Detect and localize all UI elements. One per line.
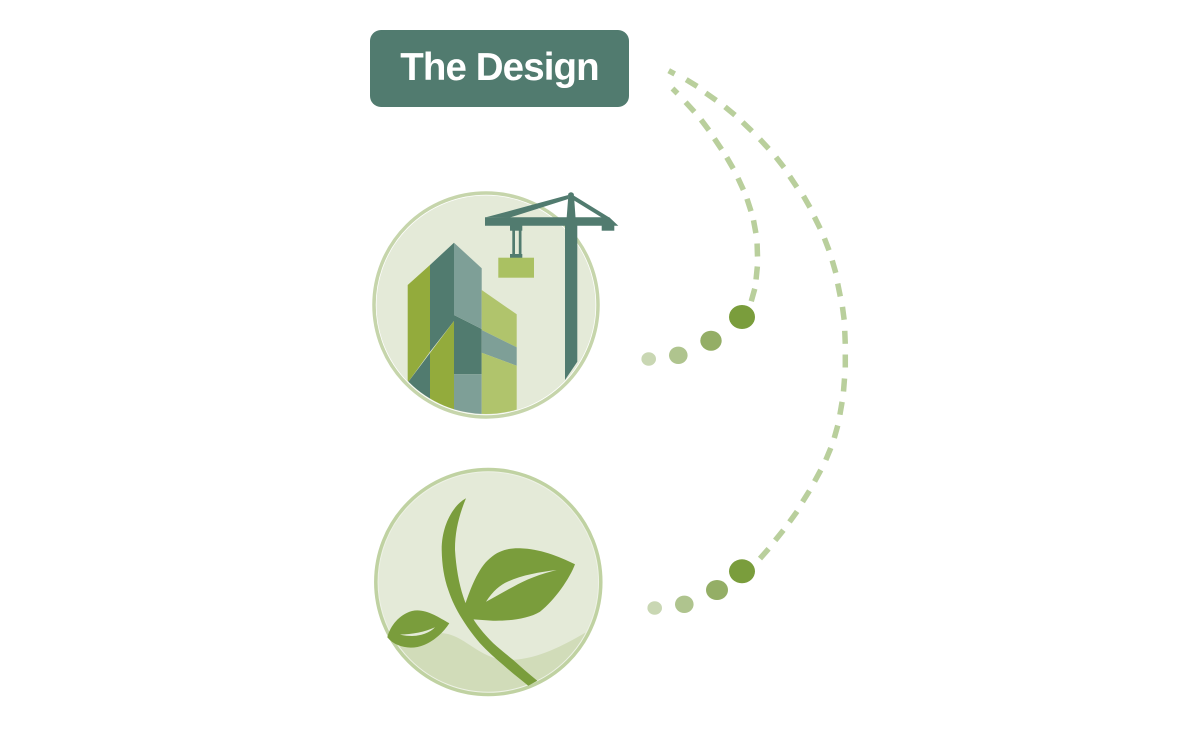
title: The Design: The Design (400, 46, 599, 89)
building badge circle (374, 193, 598, 417)
icon: building under construction with crane (374, 192, 618, 425)
dots: upper trail (641, 305, 755, 366)
dots: lower trail (647, 559, 755, 615)
dashed arc: outer, to sprout (669, 71, 845, 559)
crane load (498, 258, 534, 278)
illustration canvas (372, 68, 848, 696)
building (408, 242, 517, 414)
small leaf (387, 610, 449, 648)
stem (442, 498, 537, 686)
large leaf (465, 548, 575, 621)
title: The Design (370, 30, 629, 107)
icon: sprout with two leaves (370, 470, 601, 710)
sprout badge circle (370, 470, 601, 710)
crane (485, 192, 618, 380)
dashed arc: inner, to building (672, 88, 758, 301)
